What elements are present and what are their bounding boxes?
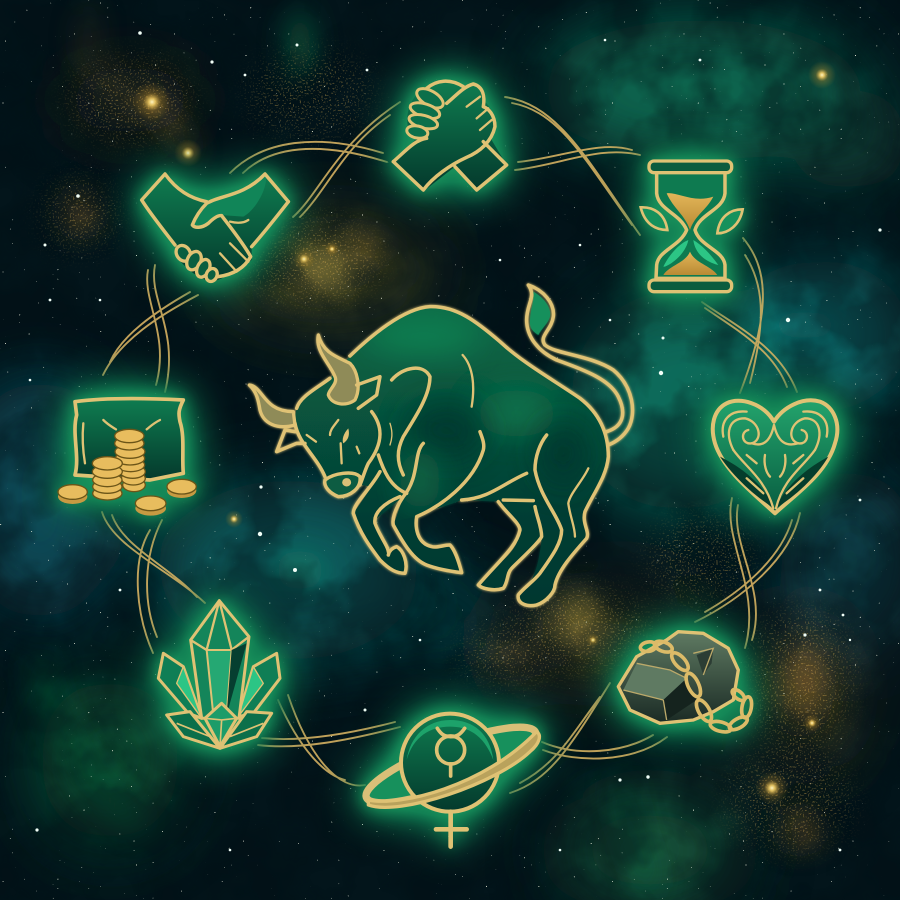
- coin stack front: [92, 457, 122, 500]
- icon: ringed planet with Taurus and Venus symbols: [359, 713, 543, 847]
- bull tail: [527, 285, 633, 445]
- icon: hourglass with leaves: [641, 161, 743, 292]
- bull body fill: [295, 307, 608, 606]
- tail tuft: [530, 292, 550, 335]
- icon: boulder with chain: [618, 632, 753, 734]
- icon: pillow with gold coins: [58, 399, 196, 516]
- bull head: [277, 377, 380, 497]
- ribbons connecting the icons: [102, 97, 800, 793]
- loose coins: [58, 479, 196, 516]
- icon: crystal cluster: [158, 601, 280, 748]
- icon: clasped hands: [393, 81, 507, 190]
- bull outline: [350, 307, 608, 606]
- icon: handshake: [142, 174, 288, 283]
- coin stack back: [115, 429, 145, 492]
- bull horns: [249, 335, 358, 427]
- central bull: [249, 285, 633, 606]
- icon: ornate heart: [713, 400, 837, 513]
